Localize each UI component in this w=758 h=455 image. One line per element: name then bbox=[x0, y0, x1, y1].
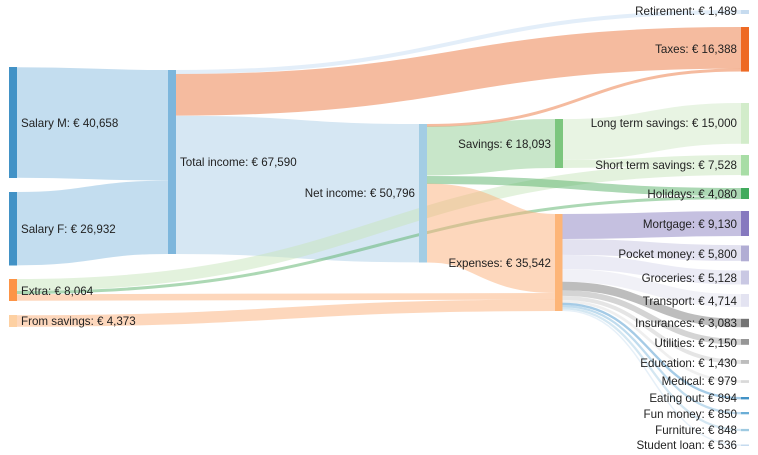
node: From savings bbox=[9, 315, 17, 327]
node: Fun money bbox=[741, 412, 749, 414]
flows: savings bbox=[17, 123, 741, 293]
flows: into expenses bbox=[17, 223, 555, 321]
node: Salary M bbox=[9, 67, 17, 178]
node: Salary F bbox=[9, 192, 17, 266]
flows: out of expenses bbox=[562, 224, 741, 445]
label: From savings: From savings: € 4,373 bbox=[21, 315, 136, 328]
node: Mortgage bbox=[741, 211, 749, 236]
label: Utilities: Utilities: € 2,150 bbox=[654, 337, 737, 350]
node: Short term savings bbox=[741, 155, 749, 176]
node: Holidays bbox=[741, 188, 749, 199]
node: Long term savings bbox=[741, 103, 749, 144]
label: Groceries: Groceries: € 5,128 bbox=[642, 272, 737, 285]
node: Taxes bbox=[741, 27, 749, 72]
label: Medical: Medical: € 979 bbox=[662, 375, 737, 388]
label: Student loan: Student loan: € 536 bbox=[636, 439, 737, 452]
label: Net income: Net income: € 50,796 bbox=[305, 187, 415, 200]
node: Retirement bbox=[741, 10, 749, 14]
label: Mortgage: Mortgage: € 9,130 bbox=[643, 218, 737, 231]
label: Holidays: Holidays: € 4,080 bbox=[647, 188, 737, 201]
label: Salary F: Salary F: € 26,932 bbox=[21, 223, 116, 236]
label: Taxes: Taxes: € 16,388 bbox=[655, 43, 737, 56]
label: Savings: Savings: € 18,093 bbox=[458, 138, 551, 151]
label: Short term savings: Short term savings: € 7,528 bbox=[595, 159, 737, 172]
node: Education bbox=[741, 360, 749, 364]
node: Savings bbox=[555, 119, 563, 168]
label: Retirement: Retirement: € 1,489 bbox=[635, 5, 737, 18]
node: Pocket money bbox=[741, 246, 749, 261]
flows: income bbox=[17, 12, 741, 229]
label: Education: Education: € 1,430 bbox=[640, 357, 737, 370]
label: Furniture: Furniture: € 848 bbox=[655, 424, 737, 437]
node: Student loan bbox=[741, 444, 749, 446]
label: Extra: Extra: € 8,064 bbox=[21, 285, 94, 298]
label: Expenses: Expenses: € 35,542 bbox=[448, 257, 551, 270]
label: Total income: Total income: € 67,590 bbox=[180, 156, 297, 169]
node: Groceries bbox=[741, 270, 749, 284]
node: Furniture bbox=[741, 429, 749, 431]
label: Long term savings: Long term savings: € 15,000 bbox=[591, 117, 737, 130]
node: Insurances bbox=[741, 319, 749, 327]
node: Net income bbox=[419, 124, 427, 262]
label: Fun money: Fun money: € 850 bbox=[644, 408, 737, 421]
node: Medical bbox=[741, 380, 749, 383]
label: Insurances: Insurances: € 3,083 bbox=[635, 317, 737, 330]
label: Salary M: Salary M: € 40,658 bbox=[21, 117, 118, 130]
node: Extra bbox=[9, 279, 17, 301]
label: Transport: Transport: € 4,714 bbox=[643, 295, 738, 308]
node: Expenses bbox=[555, 214, 562, 311]
node: Total income bbox=[168, 70, 176, 254]
node: Transport bbox=[741, 294, 749, 307]
label: Pocket money: Pocket money: € 5,800 bbox=[618, 248, 737, 261]
label: Eating out: Eating out: € 894 bbox=[649, 392, 738, 405]
node: Eating out bbox=[741, 397, 749, 399]
node: Utilities bbox=[741, 339, 749, 345]
